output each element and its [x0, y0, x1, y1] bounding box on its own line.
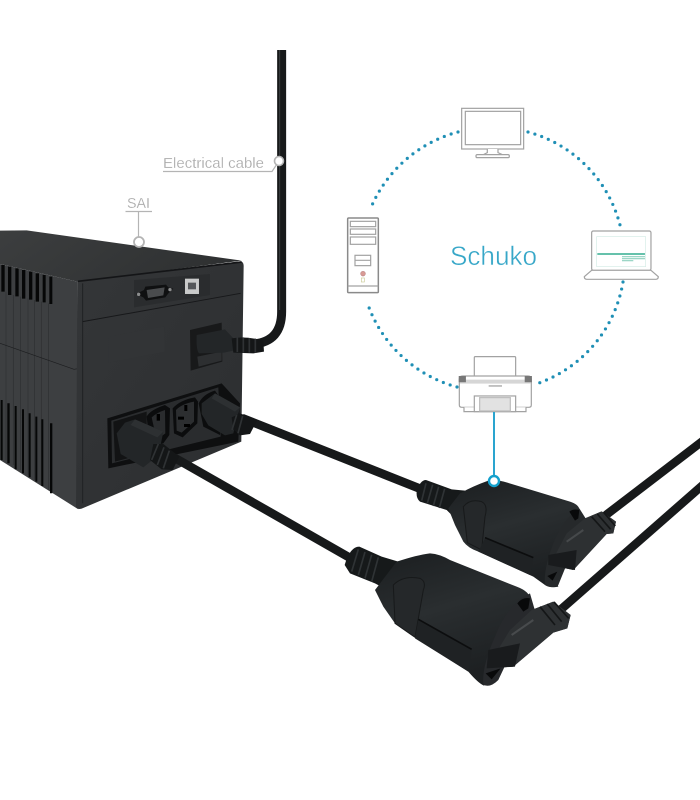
output right socket shade [199, 391, 222, 435]
side face [0, 264, 78, 509]
side ribs [6, 292, 49, 490]
strain relief [417, 480, 465, 523]
housing [375, 553, 530, 686]
ring [483, 593, 535, 686]
left output cable [175, 458, 352, 559]
input socket [190, 323, 222, 371]
angled plug front [550, 511, 616, 570]
ring holes [547, 509, 579, 581]
ring holes [486, 598, 530, 679]
schuko plug lower [345, 547, 571, 686]
serial port [136, 285, 173, 301]
C13 socket right [173, 397, 198, 437]
icon: desktop tower [348, 218, 378, 293]
bottom flap [478, 538, 533, 575]
output socket panel [107, 383, 240, 468]
lower vents [1, 400, 52, 493]
rear sockets and plugs [107, 323, 264, 470]
C13 socket left [147, 405, 170, 447]
icon: monitor [462, 108, 524, 158]
device icons [348, 108, 658, 412]
bottom flap [415, 620, 472, 672]
callout: SAI: SAI [127, 196, 150, 212]
port panel [134, 274, 210, 307]
strain relief [345, 547, 398, 593]
ring [545, 508, 587, 587]
right cables to plugs [558, 440, 700, 612]
schuko plug upper [417, 480, 616, 587]
housing [448, 480, 579, 587]
right output cable [242, 418, 427, 491]
front face [76, 261, 244, 509]
callout: SAI [126, 196, 152, 247]
angled plug behind [487, 602, 571, 668]
dotted connection ring [367, 132, 623, 387]
main power cable [253, 50, 282, 344]
top face [0, 230, 242, 282]
angled plug behind [550, 511, 616, 570]
schuko label: Schuko [450, 241, 537, 271]
upper vents [1, 265, 52, 304]
icon: printer [459, 357, 531, 412]
usb port [185, 279, 199, 294]
input plug [197, 329, 264, 353]
SAI unit [0, 50, 427, 559]
icon: laptop [584, 231, 658, 279]
seam [0, 343, 83, 369]
label plate [108, 327, 165, 363]
callout: electrical cable: Electrical cable [163, 156, 264, 172]
side tab [463, 501, 486, 550]
side tab [393, 577, 424, 637]
left output plug [117, 419, 179, 470]
schuko connector line [489, 412, 499, 486]
angled plug front [487, 602, 571, 668]
right output plug [202, 393, 257, 435]
